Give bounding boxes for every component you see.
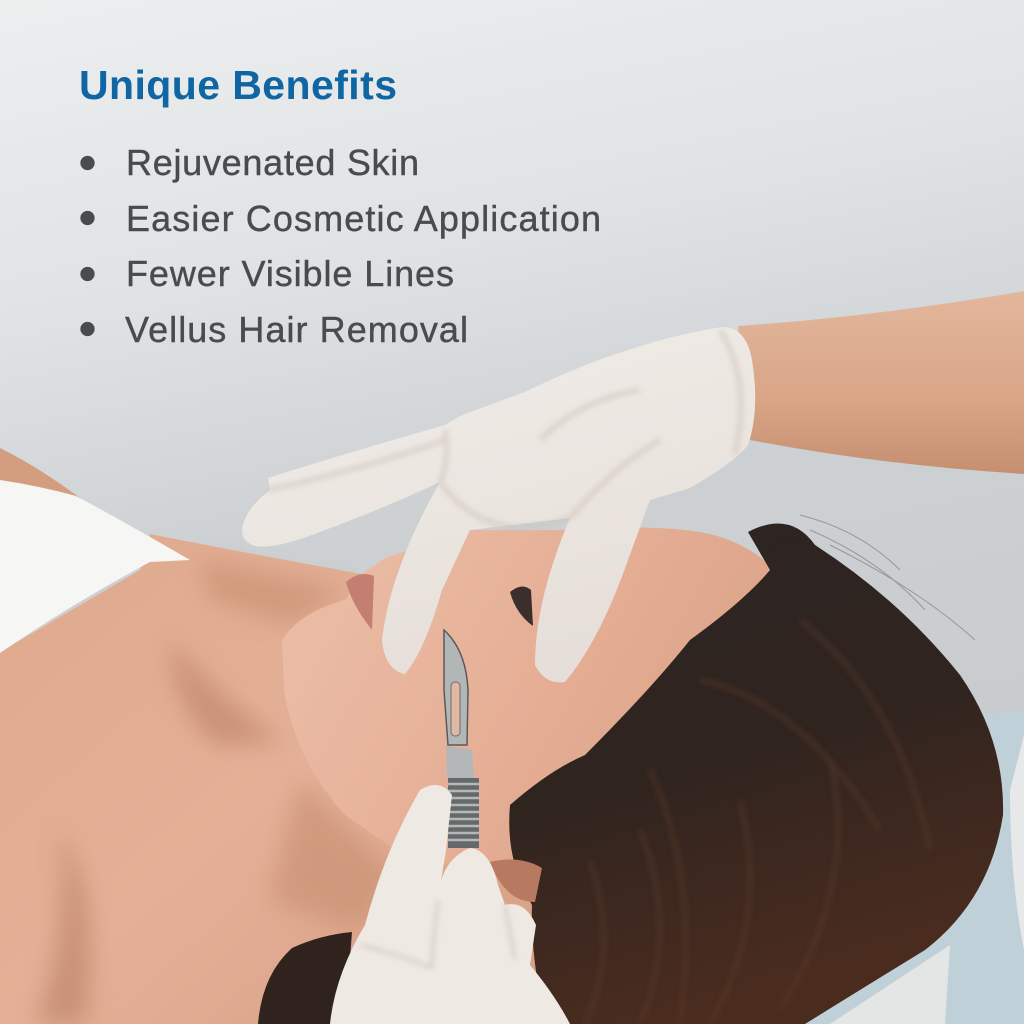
upper glove <box>242 327 755 682</box>
neck and chest shadows <box>35 560 400 1024</box>
grip ridges <box>448 784 479 840</box>
handle grip <box>448 778 479 848</box>
handle neck <box>446 746 474 778</box>
glove shading <box>268 330 741 528</box>
photo: treatment scene <box>0 291 1024 1024</box>
lower glove folds <box>360 900 515 968</box>
white towel at right edge <box>1010 735 1024 950</box>
bullet item: Fewer Visible Lines: Fewer Visible Lines <box>126 253 454 294</box>
blade slot <box>451 682 460 736</box>
far shoulder skin <box>0 448 80 500</box>
lower hair strand <box>258 932 352 1024</box>
bullet item: Easier Cosmetic Application: Easier Cosmetic Application <box>126 198 601 239</box>
wispy hair strands <box>800 515 975 640</box>
title: Unique Benefits <box>79 62 397 108</box>
benefits list <box>80 142 601 350</box>
bed sheet <box>800 712 1024 1024</box>
patient body <box>0 534 560 1024</box>
white pillow under hair <box>830 945 950 1024</box>
hair main <box>509 524 1003 1024</box>
bullet item: Vellus Hair Removal: Vellus Hair Removal <box>125 309 468 350</box>
face <box>282 527 780 880</box>
eye lashes <box>510 586 533 626</box>
ear <box>490 860 542 902</box>
white garment <box>0 480 190 653</box>
scalpel <box>444 630 479 848</box>
blade <box>444 630 468 745</box>
doctor forearm <box>738 291 1024 474</box>
lower glove <box>330 785 570 1024</box>
hair highlights <box>585 620 930 1024</box>
lips <box>346 574 374 630</box>
bullet item: Rejuvenated Skin: Rejuvenated Skin <box>126 142 419 183</box>
